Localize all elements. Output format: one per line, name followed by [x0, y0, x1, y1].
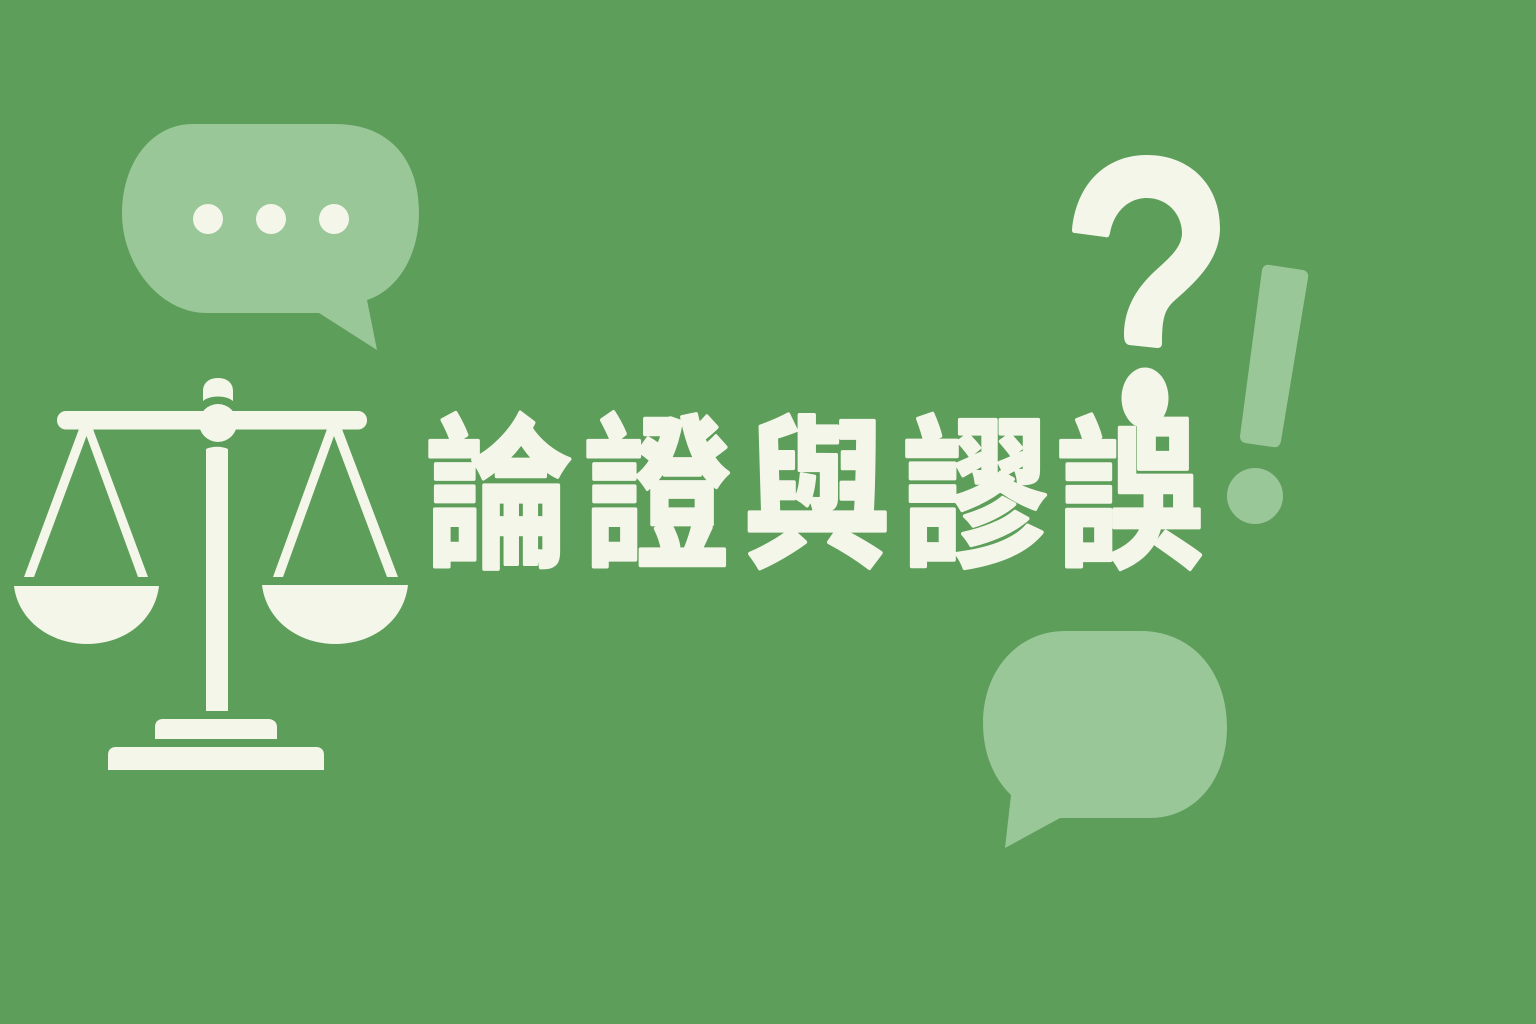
icon: exclamation mark	[1227, 265, 1308, 524]
icon: speech bubble bottom right	[983, 631, 1227, 848]
icon: balance scale	[14, 378, 408, 770]
icon: question mark	[1072, 155, 1220, 428]
icon: speech bubble top left with dots	[122, 124, 419, 350]
title: 論證與謬誤	[426, 405, 1203, 590]
